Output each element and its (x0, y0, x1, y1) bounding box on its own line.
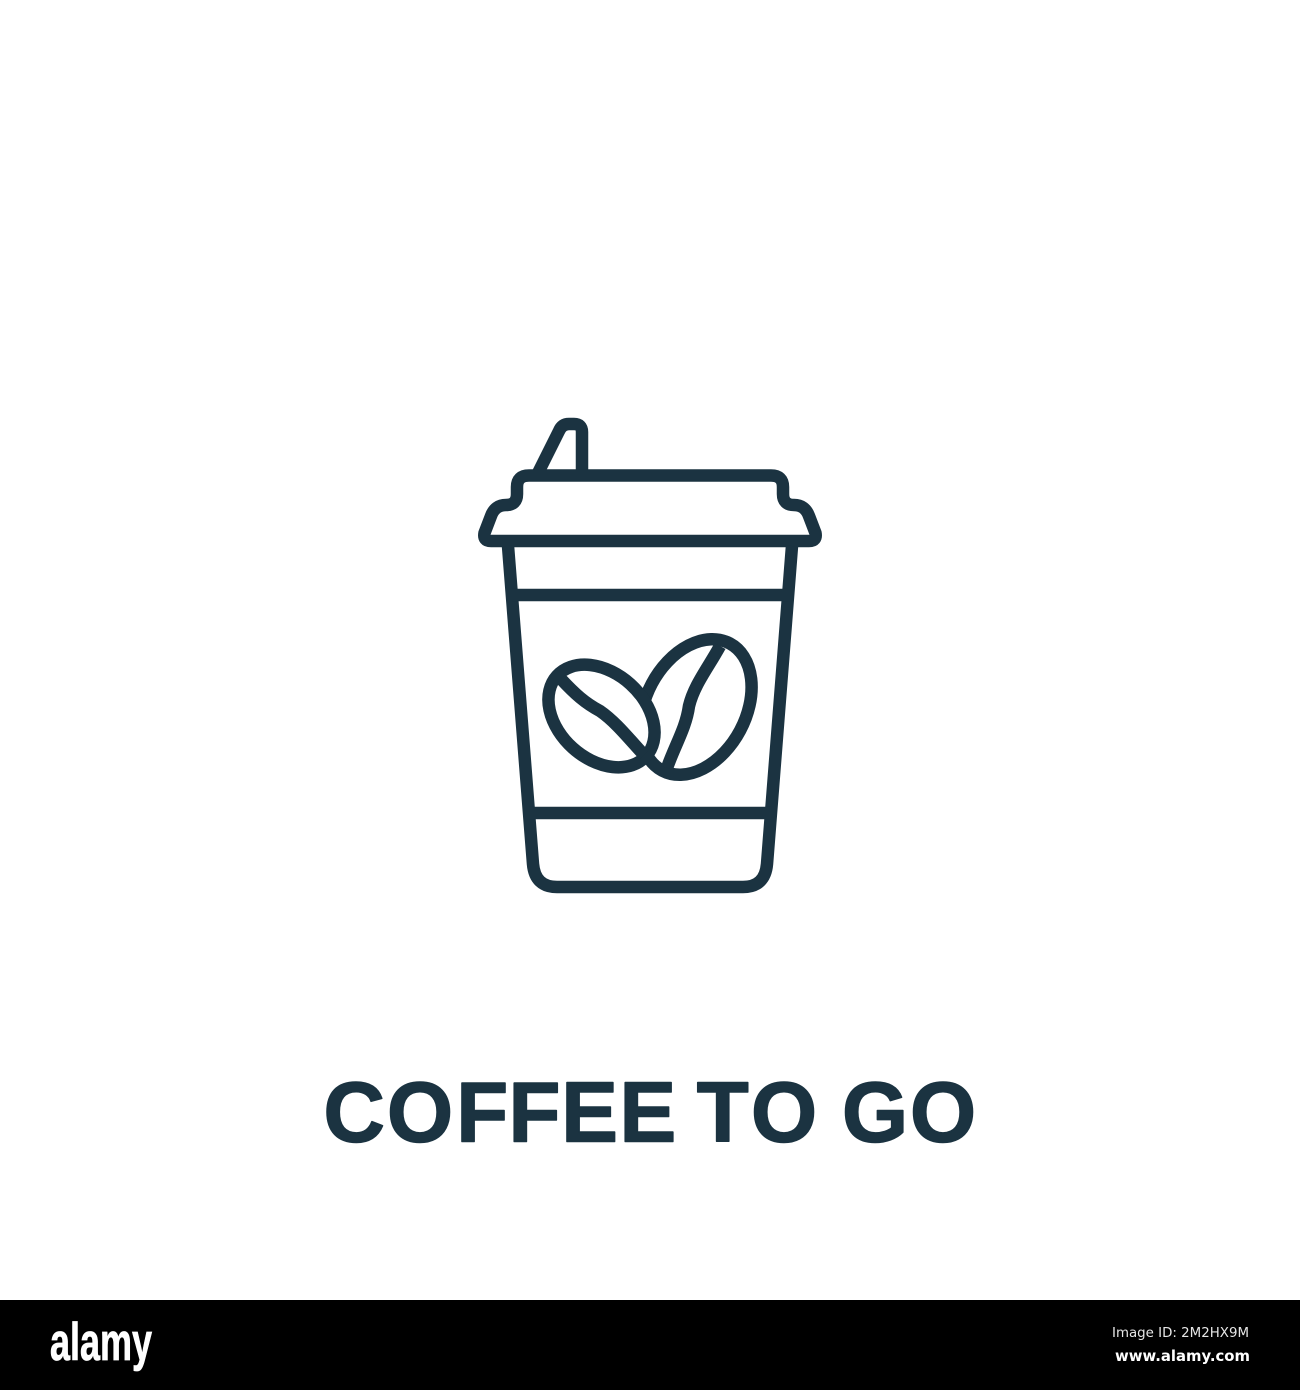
upper sleeve line (512, 589, 788, 601)
cup lid (484, 476, 816, 541)
website: www.alamy.com (1115, 1347, 1250, 1365)
icon: coffee to-go cup (484, 424, 816, 887)
lower sleeve line (529, 807, 771, 819)
footer bar (0, 1300, 1300, 1390)
alamy logo: alamy (50, 1313, 152, 1372)
coffee bean: left (528, 644, 675, 788)
title: COFFEE TO GO (324, 1066, 976, 1160)
straw (538, 424, 582, 473)
image id: Image ID: 2M2HX9M (1112, 1325, 1249, 1341)
coffee bean: right (618, 620, 774, 794)
cup body (508, 546, 792, 887)
